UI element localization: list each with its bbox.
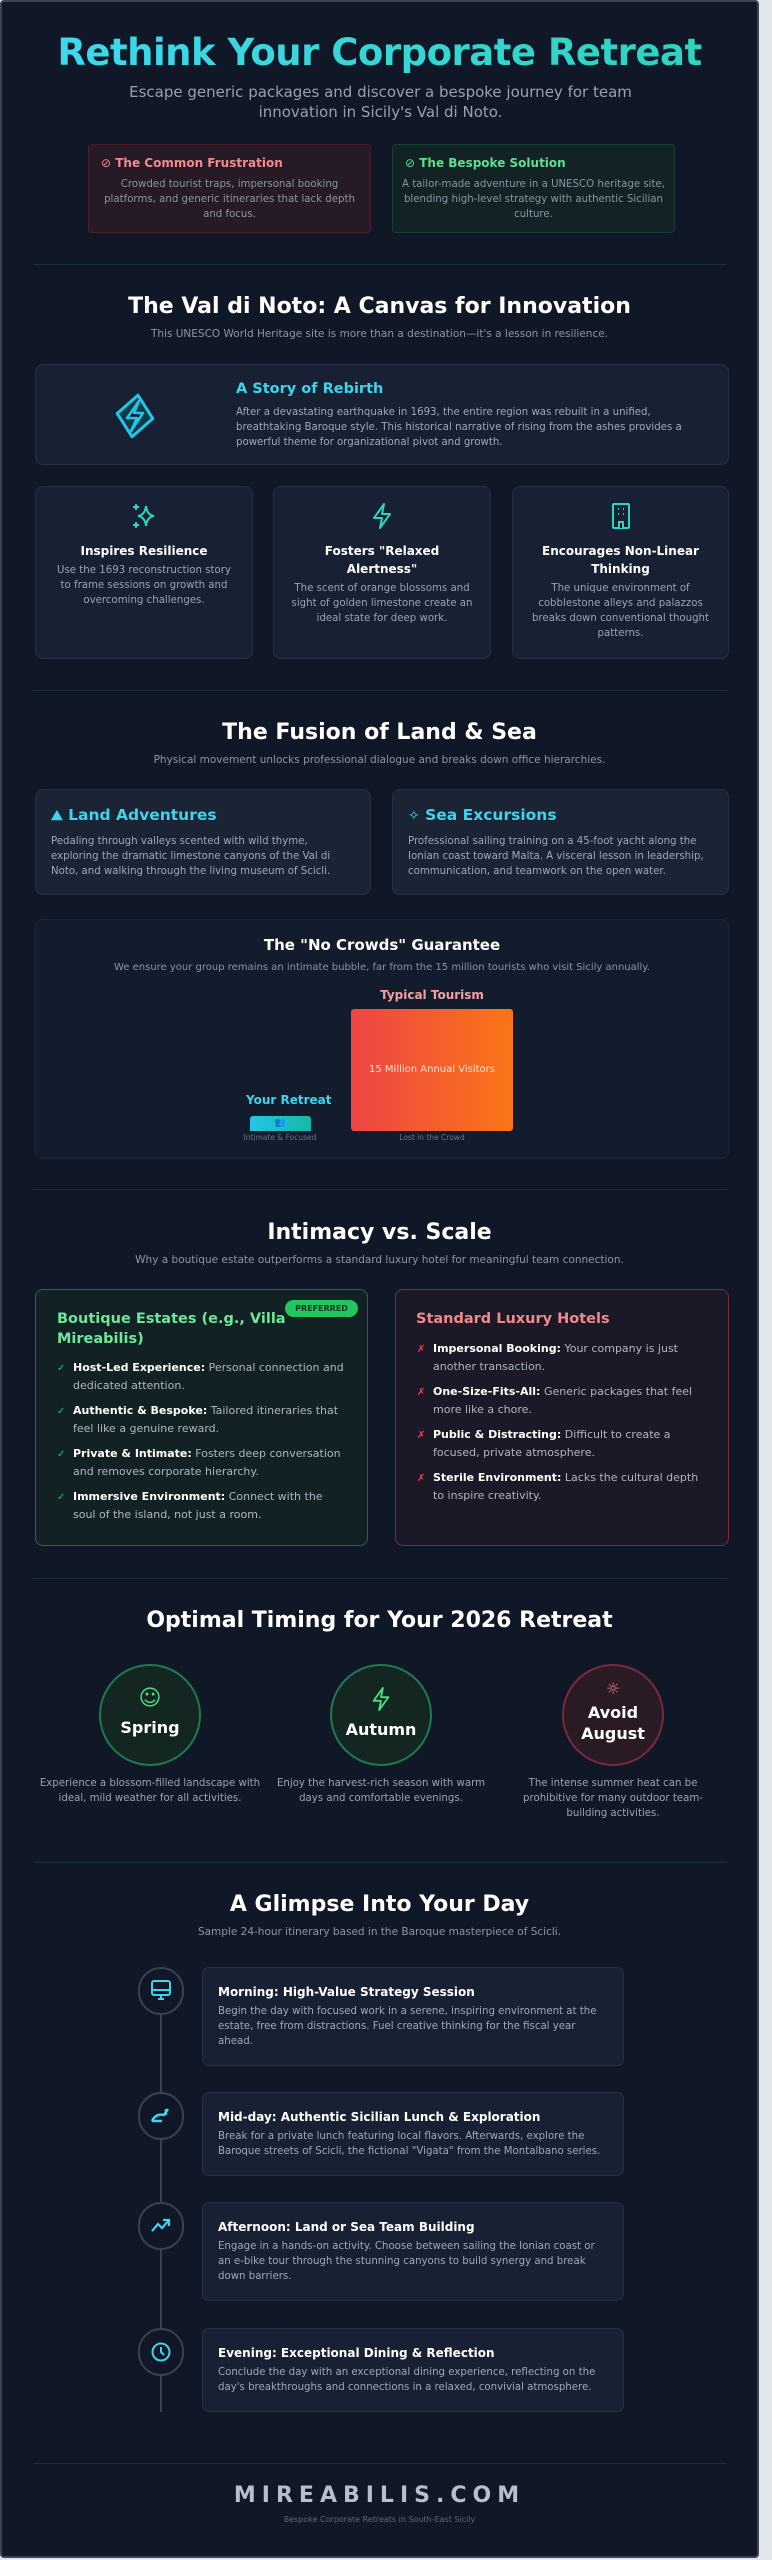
list: boutique benefits: Host-Led Experience: Personal connection and dedicated attention.: [73, 1361, 344, 1392]
circle: autumn: [330, 1664, 432, 1766]
panel: land adventures: [35, 789, 371, 895]
timeline card: afternoon: [202, 2202, 624, 2301]
bar: your retreat: [250, 1116, 311, 1131]
heading: val di noto: The Val di Noto: A Canvas for Innovation: [128, 294, 631, 319]
footer brand: MIREABILIS.COM: [234, 2483, 525, 2508]
text: The unique environment of cobblestone alleys and palazzos breaks down conventional thought patterns.: [532, 583, 709, 639]
list: hotel drawbacks: Public & Distracting: Difficult to create a focused, private atmosphere.: [433, 1428, 671, 1459]
timeline card: mid-day: Break for a private lunch featuring local flavors. Afterwards, explore the Baroque streets of Scicli, the fictional "Vigata" from the Montalbano series.: [218, 2131, 600, 2157]
subheading: val di noto: This UNESCO World Heritage site is more than a destination—it's a lesson in resilience.: [151, 328, 608, 340]
timeline card: morning: [202, 1967, 624, 2066]
timeline card: afternoon: Afternoon: Land or Sea Team Building: [218, 2220, 475, 2234]
subheading: intimacy: Why a boutique estate outperforms a standard luxury hotel for meaningful team connection.: [135, 1254, 624, 1266]
heading: hotels: Standard Luxury Hotels: [416, 1311, 610, 1327]
heading: Inspires Resilience: [80, 544, 208, 558]
title: Rethink Your Corporate Retreat: [57, 31, 702, 74]
timeline icon: afternoon: [138, 2202, 184, 2250]
circle: august: Avoid: [588, 1703, 638, 1722]
heading: story: A Story of Rebirth: [236, 381, 383, 397]
list: hotel drawbacks: Impersonal Booking: Your company is just another transaction.: [433, 1342, 678, 1373]
heading: frustration: ⊘ The Common Frustration: [101, 156, 283, 170]
timeline card: evening: Evening: Exceptional Dining & Reflection: [218, 2346, 495, 2360]
caption: Intimate & Focused: [244, 1133, 316, 1142]
circle: august: [562, 1664, 664, 1766]
label: typical tourism: Typical Tourism: [380, 988, 484, 1002]
season: avoid august: [523, 1664, 703, 1819]
list: hotel drawbacks: ✗: [417, 1387, 425, 1398]
subheading: glimpse: Sample 24-hour itinerary based in the Baroque masterpiece of Scicli.: [198, 1926, 561, 1938]
list: boutique benefits: ✓: [57, 1492, 65, 1503]
caption: Lost in the Crowd: [399, 1133, 465, 1142]
timeline card: mid-day: Mid-day: Authentic Sicilian Lunch & Exploration: [218, 2110, 540, 2124]
timeline card: evening: [202, 2328, 624, 2412]
text: solution: A tailor-made adventure in a UNESCO heritage site, blending high-level strategy with authentic Sicilian culture.: [402, 179, 665, 220]
badge: preferred: [285, 1300, 358, 1317]
list: hotel drawbacks: ✗: [417, 1473, 425, 1484]
list: boutique benefits: ✓: [57, 1449, 65, 1460]
panel: relaxed alertness: [273, 486, 491, 659]
heading: timing: Optimal Timing for Your 2026 Retreat: [146, 1608, 613, 1633]
icon: building: [612, 503, 630, 529]
icon: bolt: [373, 503, 391, 529]
list: boutique benefits: ✓: [57, 1363, 65, 1374]
season: spring: [40, 1664, 260, 1804]
season: autumn: [277, 1664, 485, 1804]
circle: august: August: [581, 1724, 645, 1743]
text: land: Pedaling through valleys scented with wild thyme, exploring the dramatic limestone canyons of the Val di Noto, and walking through the living museum of Scicli.: [51, 836, 330, 877]
timeline card: mid-day: [202, 2092, 624, 2176]
text: august: The intense summer heat can be prohibitive for many outdoor team-building activities.: [523, 1778, 703, 1819]
text: sea: Professional sailing training on a 45-foot yacht along the Ionian coast toward Malta. A visceral lesson in leadership, communication, and teamwork on the open water.: [408, 836, 704, 877]
list: boutique benefits: Private & Intimate: Fosters deep conversation and removes corporate hierarchy.: [73, 1447, 341, 1478]
bar chart: [244, 988, 513, 1142]
heading: Encourages Non-Linear Thinking: [542, 544, 699, 576]
list: hotel drawbacks: [417, 1342, 698, 1502]
circle: spring: [99, 1664, 201, 1766]
bar: your retreat: 👥: [275, 1118, 286, 1128]
text: autumn: Enjoy the harvest-rich season with warm days and comfortable evenings.: [277, 1778, 485, 1804]
heading: fusion: The Fusion of Land & Sea: [222, 720, 537, 745]
timeline card: evening: Conclude the day with an exceptional dining experience, reflecting on the day's breakthroughs and connections in a relaxed, convivial atmosphere.: [218, 2367, 595, 2393]
panel: story of rebirth: [35, 364, 729, 465]
panel: boutique estates: [35, 1289, 368, 1546]
subtitle: Escape generic packages and discover a bespoke journey for team innovation in Sicily's Val di Noto.: [129, 83, 632, 121]
subheading: fusion: Physical movement unlocks professional dialogue and breaks down office hierarchies.: [154, 754, 605, 766]
circle: spring: ☺: [139, 1686, 161, 1711]
panel: common frustration: [88, 144, 371, 233]
panel: inspires resilience: [35, 486, 253, 659]
bar: typical tourism: [351, 1009, 513, 1131]
heading: boutique: Boutique Estates (e.g., Villa Mireabilis): [57, 1311, 286, 1347]
text: story: After a devastating earthquake in 1693, the entire region was rebuilt in a unified, breathtaking Baroque style. This historical narrative of rising from the ashes provides a powerful theme for organizational pivot and growth.: [236, 407, 682, 448]
heading: Fosters "Relaxed Alertness": [325, 544, 439, 576]
heading: no crowds: The "No Crowds" Guarantee: [264, 936, 500, 954]
list: hotel drawbacks: ✗: [417, 1344, 425, 1355]
heading: solution: ⊘ The Bespoke Solution: [405, 156, 566, 170]
timeline icon: morning: [138, 1967, 184, 2015]
panel: non-linear thinking: [512, 486, 729, 659]
text: spring: Experience a blossom-filled landscape with ideal, mild weather for all activities.: [40, 1778, 260, 1804]
heading: glimpse: A Glimpse Into Your Day: [230, 1892, 529, 1917]
timeline icon: mid-day: [138, 2092, 184, 2140]
list: hotel drawbacks: One-Size-Fits-All: Generic packages that feel more like a chore.: [433, 1385, 692, 1416]
text: The scent of orange blossoms and sight of golden limestone create an ideal state for deep work.: [292, 583, 472, 624]
icon: rebirth: [116, 394, 154, 438]
timeline card: morning: Begin the day with focused work in a serene, inspiring environment at the estate, free from distractions. Fuel creative thinking for the fiscal year ahead.: [218, 2006, 596, 2047]
timeline icon: evening: [138, 2328, 184, 2376]
timeline card: morning: Morning: High-Value Strategy Session: [218, 1985, 475, 1999]
text: Use the 1693 reconstruction story to frame sessions on growth and overcoming challenges.: [57, 565, 231, 606]
heading: intimacy: Intimacy vs. Scale: [267, 1220, 492, 1245]
text: frustration: Crowded tourist traps, impersonal booking platforms, and generic itineraries that lack depth and focus.: [104, 179, 355, 220]
timeline card: afternoon: Engage in a hands-on activity. Choose between sailing the Ionian coast or an e-bike tour through the stunning canyons to build synergy and break down barriers.: [218, 2241, 595, 2282]
circle: autumn: Autumn: [346, 1720, 416, 1739]
icon: sparkles: [133, 504, 154, 528]
heading: land: ⛰ Land Adventures: [51, 806, 217, 824]
circle: spring: Spring: [120, 1718, 180, 1737]
panel: bespoke solution: [392, 144, 675, 233]
footer tagline: Bespoke Corporate Retreats in South-East Sicily: [284, 2515, 475, 2524]
list: boutique benefits: Immersive Environment: Connect with the soul of the island, not just a room.: [73, 1490, 323, 1521]
list: hotel drawbacks: Sterile Environment: Lacks the cultural depth to inspire creativity.: [433, 1471, 698, 1502]
heading: sea: ✧ Sea Excursions: [408, 806, 557, 824]
list: boutique benefits: ✓: [57, 1406, 65, 1417]
timeline line: [160, 2002, 162, 2412]
list: boutique benefits: [57, 1361, 344, 1521]
badge: preferred: PREFERRED: [295, 1304, 348, 1313]
list: hotel drawbacks: ✗: [417, 1430, 425, 1441]
bar: typical tourism: 15 Million Annual Visitors: [369, 1064, 495, 1075]
panel: sea excursions: [392, 789, 729, 895]
subheading: no crowds: We ensure your group remains an intimate bubble, far from the 15 million tourists who visit Sicily annually.: [114, 962, 650, 973]
panel: no crowds guarantee: [35, 919, 729, 1159]
circle: august: ☼: [606, 1679, 620, 1698]
panel: standard hotels: [395, 1289, 729, 1546]
list: boutique benefits: Authentic & Bespoke: Tailored itineraries that feel like a genuine reward.: [73, 1404, 338, 1435]
label: your retreat: Your Retreat: [246, 1093, 331, 1107]
